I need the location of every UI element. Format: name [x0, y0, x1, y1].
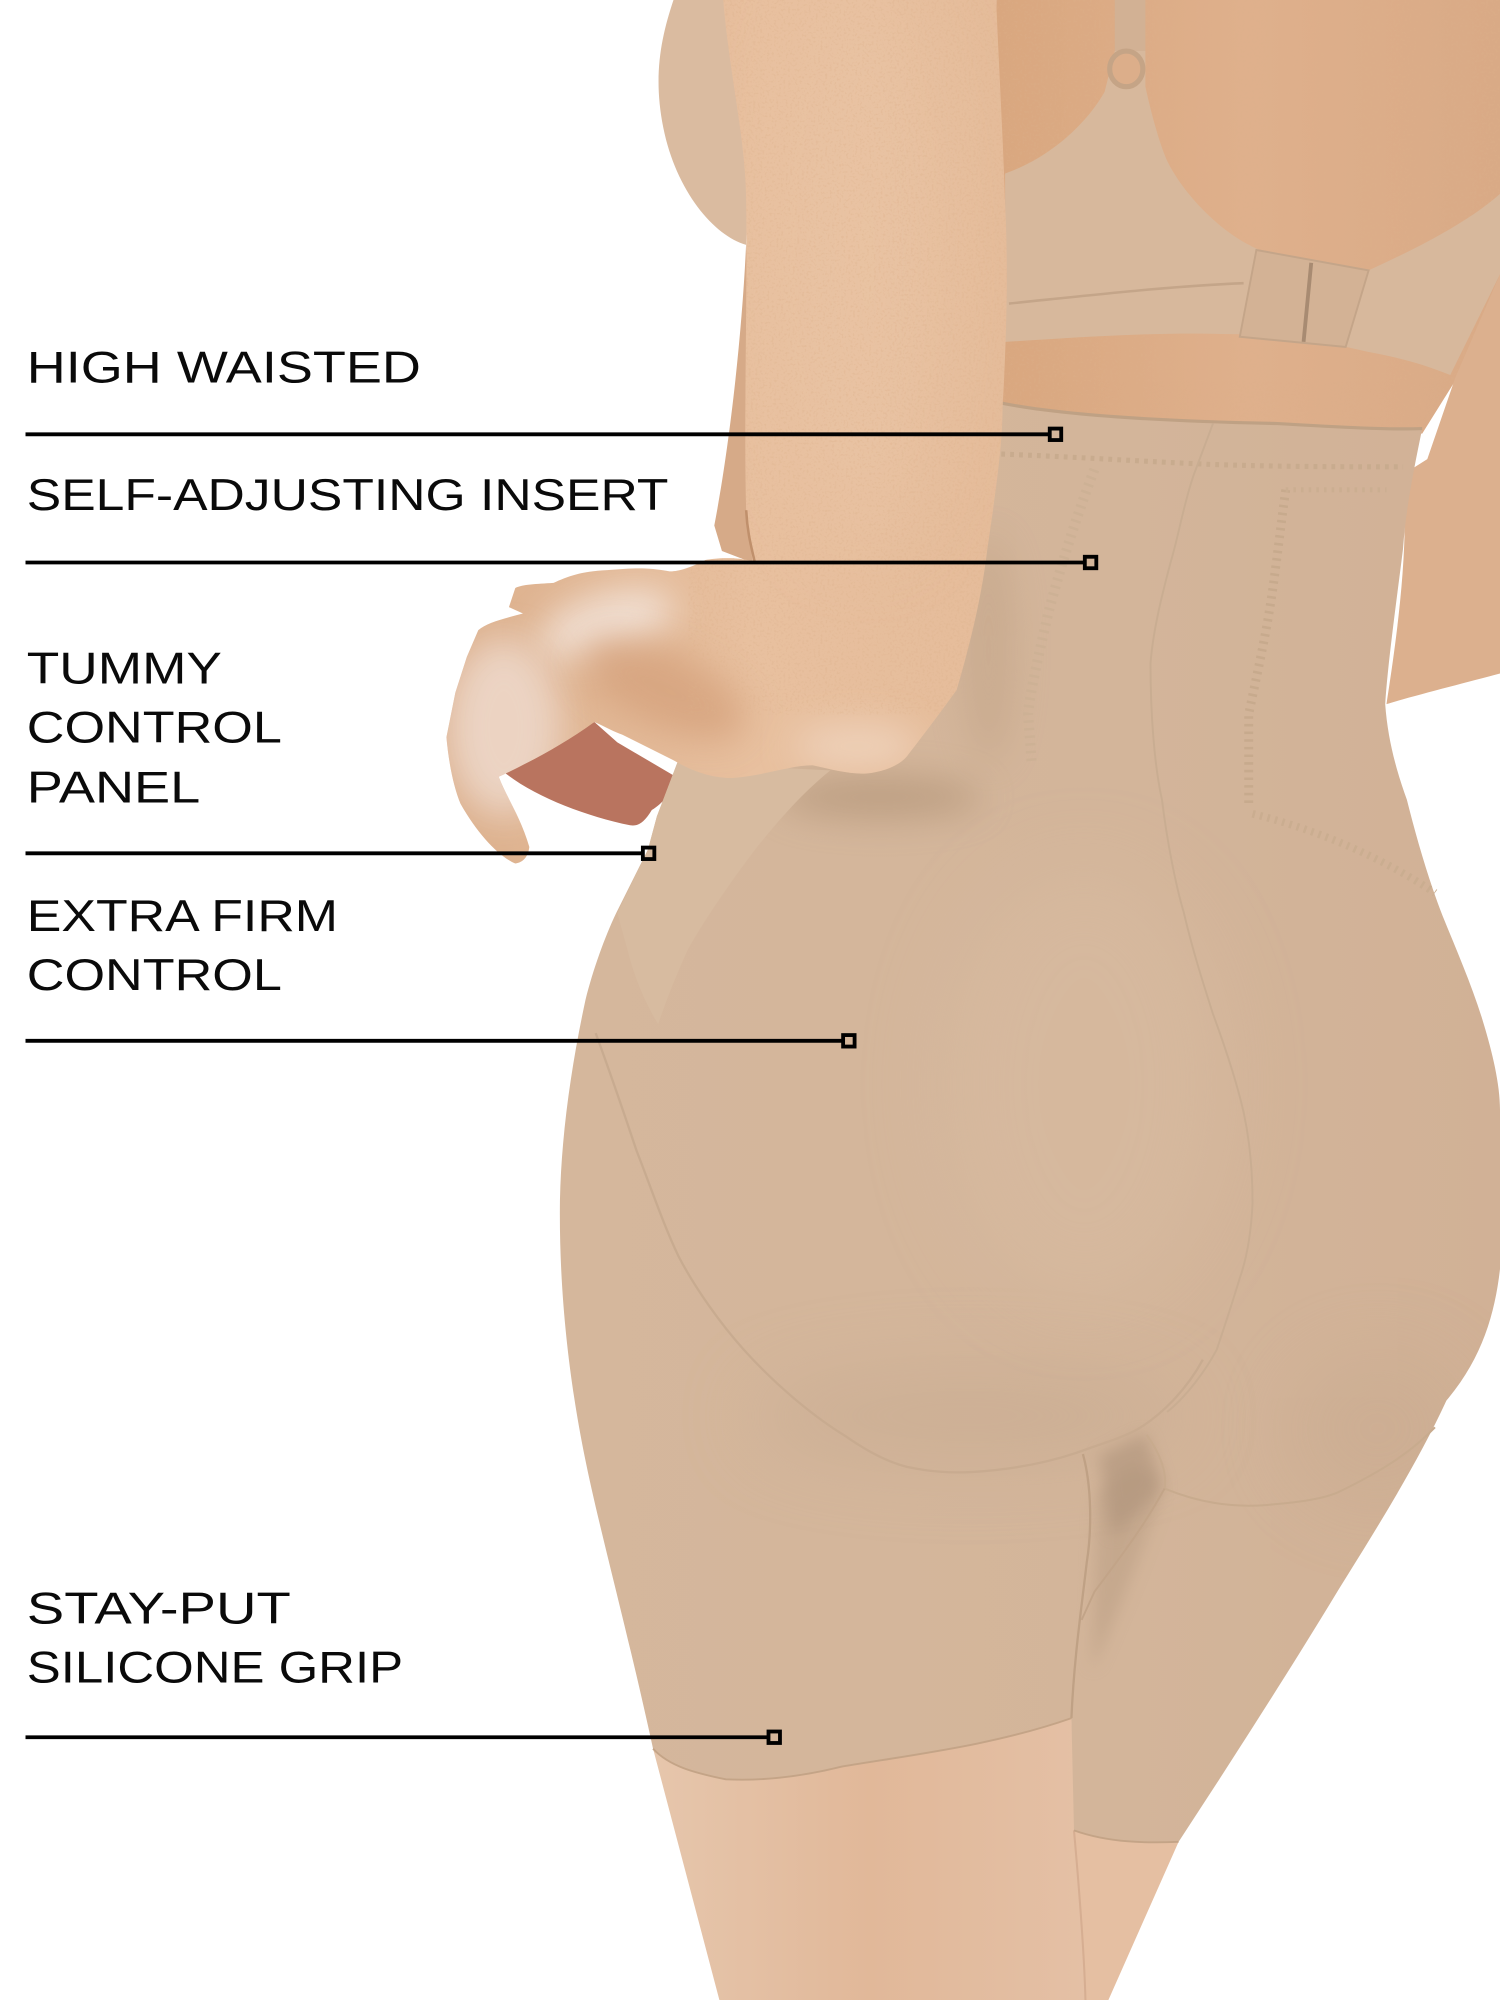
heading: stay-put silicone grip: STAY-PUT	[27, 1585, 291, 1634]
heading: stay-put silicone grip: SILICONE GRIP	[27, 1643, 403, 1692]
right panel stitching	[1253, 814, 1435, 893]
far cheek seam	[1147, 1427, 1435, 1506]
marker: high waisted	[1050, 429, 1061, 440]
garment: high waisted shaper	[560, 403, 1500, 1842]
callout: extra firm control	[26, 892, 855, 1047]
marker: stay-put silicone grip	[768, 1732, 780, 1743]
callout: tummy control panel	[26, 645, 654, 859]
bra back wing	[1005, 0, 1500, 375]
heading: tummy control panel: CONTROL	[27, 703, 282, 752]
far thigh skin	[1074, 1830, 1179, 2000]
heading: extra firm control: CONTROL	[27, 951, 282, 1000]
marker: tummy control panel	[643, 848, 654, 859]
heading: tummy control panel: TUMMY	[27, 645, 222, 694]
far arm	[1386, 274, 1500, 704]
leader line: high waisted	[26, 433, 1050, 436]
heading: high waisted: HIGH WAISTED	[27, 344, 421, 393]
strap ring	[1110, 51, 1143, 87]
center back seam	[1151, 423, 1253, 1412]
heading: extra firm control: EXTRA FIRM	[27, 892, 338, 941]
marker: self-adjusting insert	[1085, 557, 1096, 568]
near arm and hand	[446, 0, 1008, 864]
bra band seam	[1009, 283, 1244, 304]
far leg hem	[1074, 1830, 1179, 1842]
bra clasp	[1240, 250, 1369, 347]
callout: self-adjusting insert	[26, 471, 1096, 568]
heading: stay-put silicone grip	[27, 1585, 403, 1692]
elbow crease	[746, 510, 755, 564]
upper back skin	[996, 0, 1500, 434]
near cheek seam	[596, 1033, 1203, 1472]
bra strap	[1115, 0, 1145, 51]
leader line: tummy control panel	[26, 852, 643, 855]
heading: extra firm control	[27, 892, 338, 1000]
clasp hook line	[1304, 263, 1311, 342]
heading: tummy control panel	[27, 645, 282, 812]
leader line: self-adjusting insert	[26, 561, 1085, 564]
waistband stitching	[1001, 454, 1403, 467]
heading: tummy control panel: PANEL	[27, 763, 200, 812]
heading: self-adjusting insert: SELF-ADJUSTING INSERT	[27, 471, 668, 520]
tummy control panel	[617, 763, 830, 1024]
marker: extra firm control	[843, 1035, 855, 1047]
figure: model wearing shaper	[446, 0, 1500, 2000]
self-adjusting insert stitching left	[1028, 469, 1094, 765]
near leg hem	[653, 1718, 1071, 1780]
near thigh skin	[653, 1718, 1085, 2000]
insert top stitching	[1286, 488, 1386, 492]
waistband edge	[1001, 403, 1422, 429]
near leg inner edge	[1071, 1454, 1090, 1718]
leader line: extra firm control	[26, 1039, 843, 1042]
leader line: stay-put silicone grip	[26, 1736, 769, 1739]
callout: high waisted	[26, 344, 1061, 440]
fingers behind the garment	[505, 722, 682, 825]
inner leg seam	[1082, 1489, 1165, 1620]
callout: stay-put silicone grip	[26, 1585, 780, 1743]
bra cup at the front	[659, 0, 753, 245]
self-adjusting insert stitching right	[1249, 490, 1286, 804]
torso side below the arm	[714, 242, 755, 564]
thigh divide	[1074, 1830, 1085, 2000]
